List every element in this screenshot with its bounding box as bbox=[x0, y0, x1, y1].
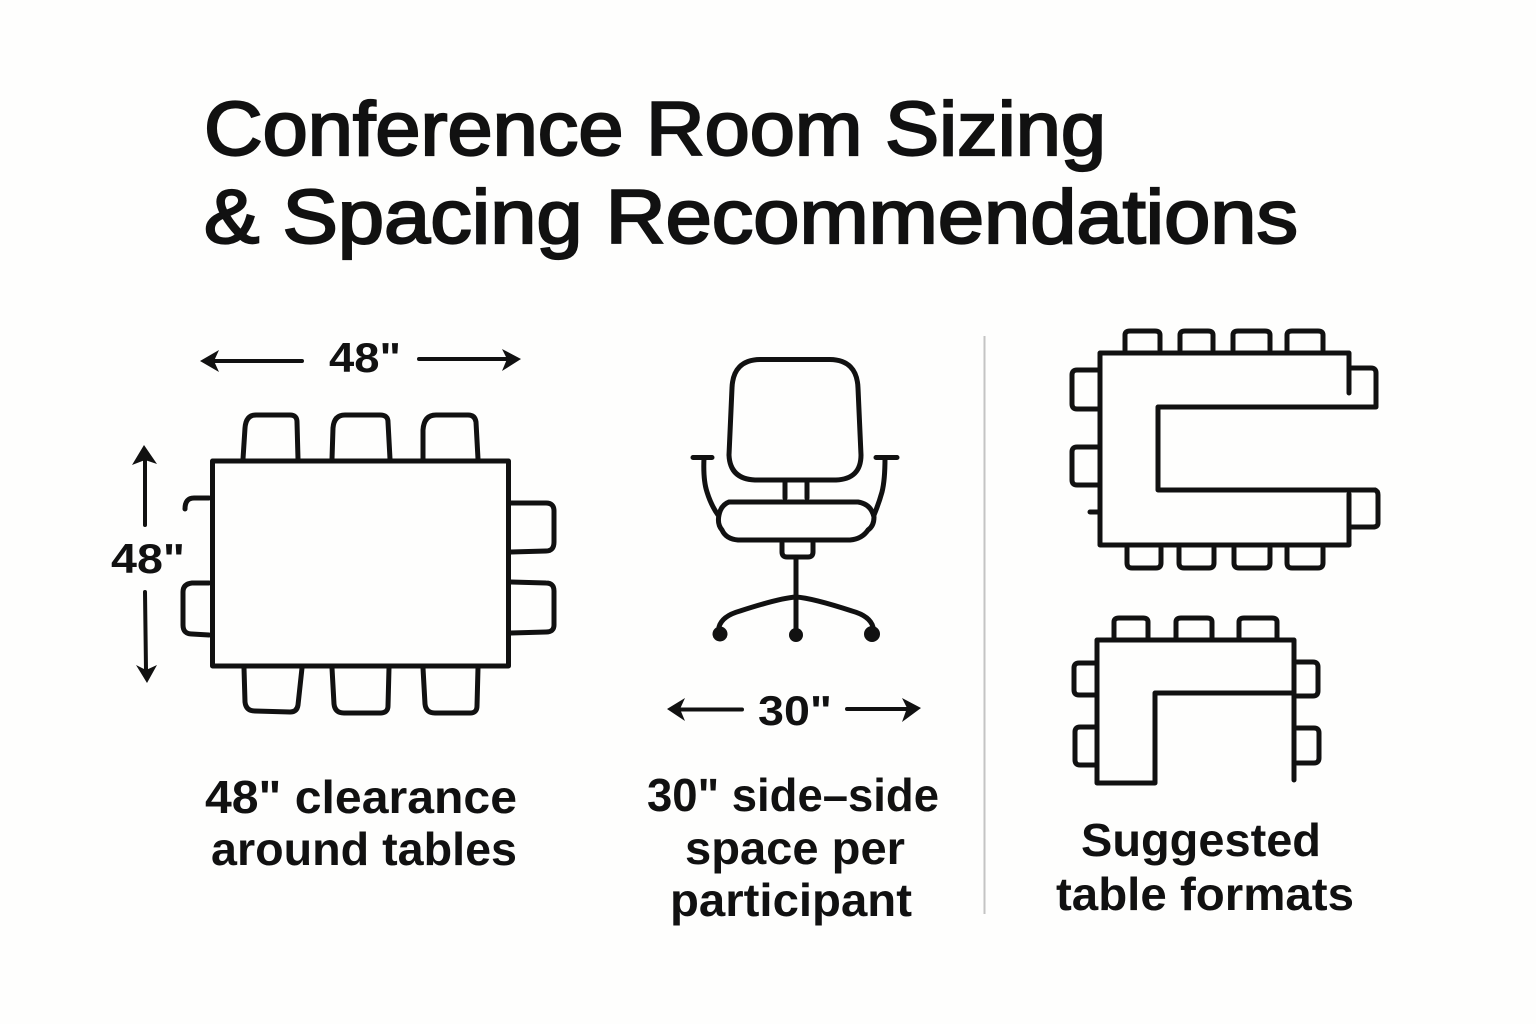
caption: clearance: 48" clearance bbox=[205, 771, 517, 823]
arrow: 30 inch dimension bbox=[667, 687, 921, 734]
arrow: horizontal 48 inch dimension: 48" bbox=[329, 334, 401, 381]
caption: table formats: table formats bbox=[1056, 868, 1354, 920]
caption: table formats bbox=[1056, 814, 1354, 920]
caption: clearance: around tables bbox=[211, 823, 517, 875]
title: & Spacing Recommendations bbox=[204, 175, 1298, 260]
panel: chair spacing bbox=[647, 360, 939, 926]
arrow: 30 inch dimension: 30" bbox=[758, 687, 832, 734]
arrow: horizontal 48 inch dimension bbox=[200, 334, 521, 381]
arrow: vertical 48 inch dimension: 48" bbox=[111, 535, 185, 582]
caption: side spacing bbox=[647, 769, 939, 926]
title: Conference Room Sizing bbox=[204, 87, 1106, 172]
caption: table formats: Suggested bbox=[1081, 814, 1321, 866]
divider bbox=[984, 336, 986, 914]
arrow: vertical 48 inch dimension bbox=[111, 445, 185, 683]
icon: office chair bbox=[693, 360, 897, 642]
caption: clearance bbox=[205, 771, 517, 875]
caption: side spacing: participant bbox=[670, 874, 912, 926]
panel: table clearance bbox=[111, 334, 554, 875]
icon: L-shaped table bbox=[1074, 618, 1319, 783]
title bbox=[204, 87, 1298, 260]
icon: U-shaped table bbox=[1072, 331, 1378, 568]
icon: rectangular table with chairs bbox=[183, 415, 554, 713]
caption: side spacing: space per bbox=[685, 822, 905, 874]
panel: table formats bbox=[1056, 331, 1378, 920]
caption: side spacing: 30" side–side bbox=[647, 769, 939, 821]
